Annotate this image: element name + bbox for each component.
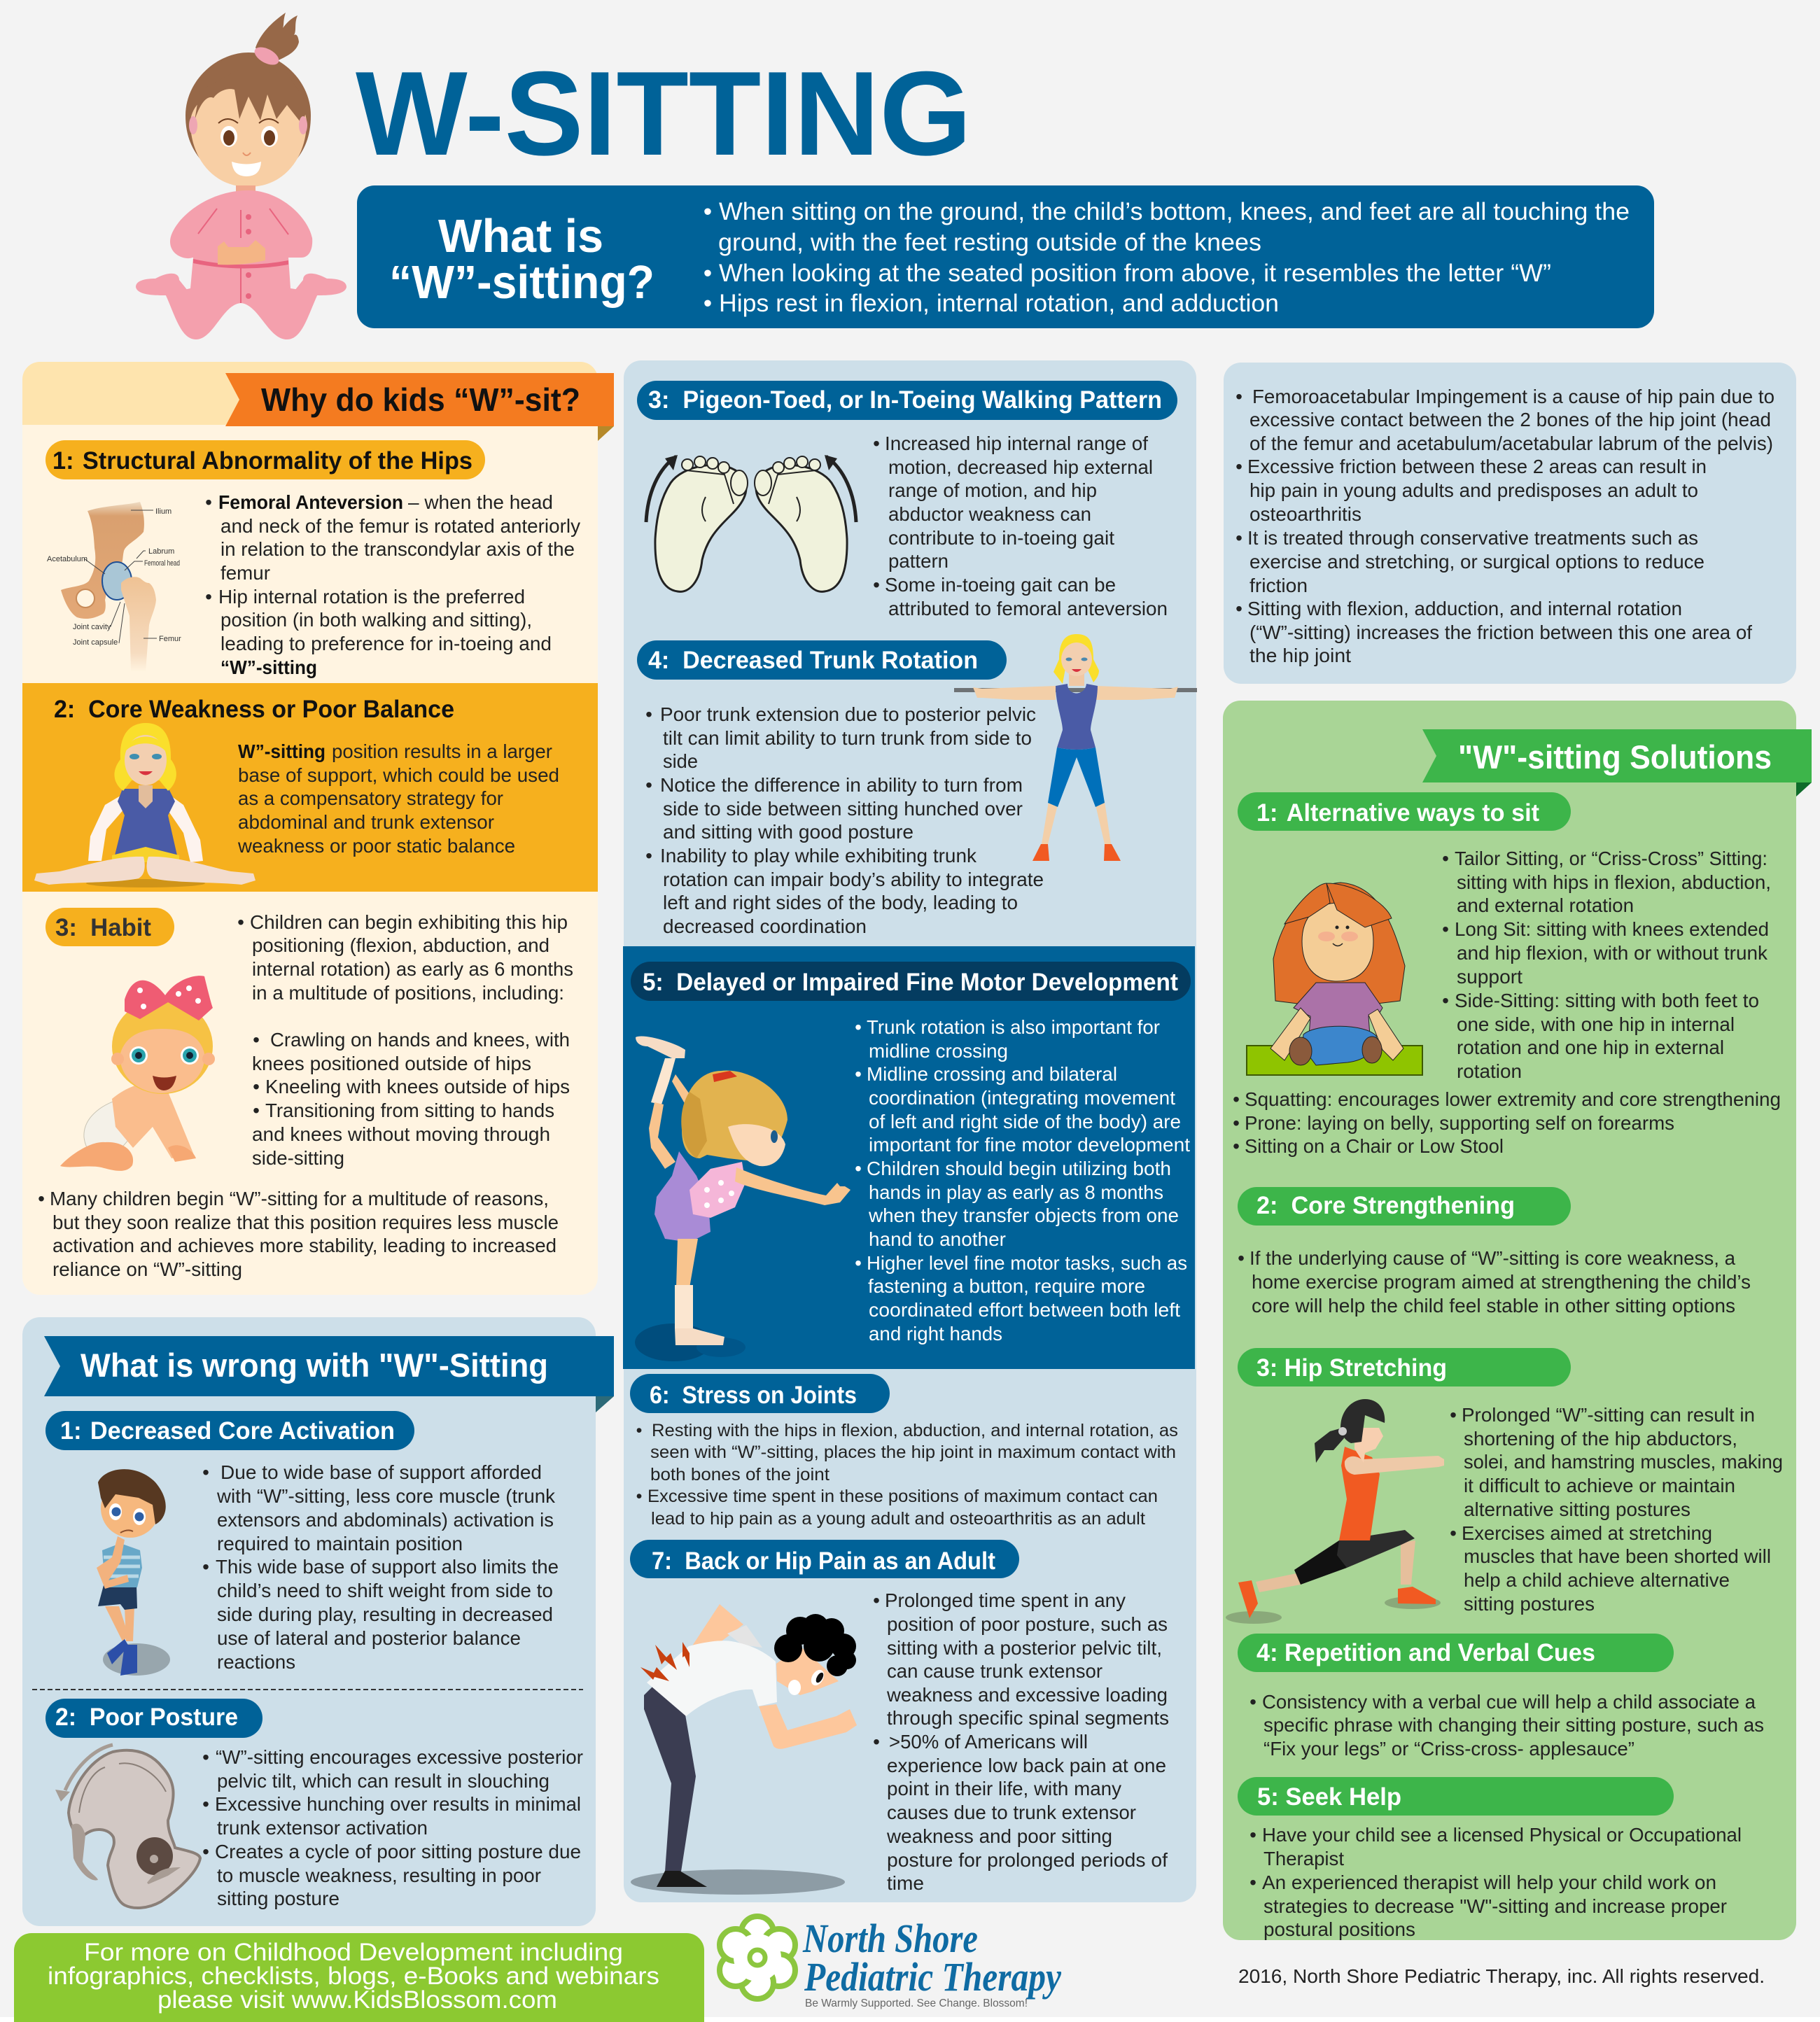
text: trunk rotation bullets: left and right sides of the body, leading to (663, 892, 1018, 913)
text: poor posture bullets: to muscle weakness, resulting in poor (217, 1865, 541, 1886)
panel: what is W-sitting (357, 185, 1654, 328)
text: verbal cues bullet: “Fix your legs” or “Criss-cross- applesauce” (1264, 1738, 1634, 1760)
text: alternative sitting bullets: • (1442, 918, 1449, 940)
text: in-toeing bullets: attributed to femoral anteversion (888, 598, 1168, 619)
text: habit bullets: • (253, 1076, 260, 1097)
text: habit bullets: • (253, 1100, 260, 1121)
text: poor posture bullets: sitting posture (217, 1888, 340, 1909)
text: alternative sitting bullets: one side, with one hip in internal (1457, 1013, 1735, 1035)
text: back pain bullets: • (873, 1589, 880, 1611)
text: alternative sitting bullets (1233, 848, 1781, 1157)
text: core activation bullets: Due to wide base of support afforded (220, 1461, 542, 1483)
text: in-toeing bullets: pattern (888, 550, 948, 572)
footer callout: more on childhood development: please visit www.KidsBlossom.com (158, 1986, 557, 2014)
panel: W-sitting solutions (1223, 701, 1812, 1940)
text: back pain bullets: point in their life, with many (887, 1778, 1121, 1799)
illustration: in-toeing feet with arrows (646, 455, 856, 591)
text: fine motor bullets: Midline crossing and bilateral (867, 1063, 1117, 1085)
panel: femoroacetabular impingement: the hip joint (1250, 645, 1351, 666)
illustration: thinking boy (97, 1469, 170, 1676)
heading: back or hip pain: 7: Back or Hip Pain as an Adult (652, 1547, 995, 1575)
text: fine motor bullets: fastening a button, require more (868, 1275, 1145, 1297)
ribbon: what is wrong: What is wrong with "W"-Sitting (80, 1347, 548, 1384)
panel: middle column reasons (623, 360, 1197, 1902)
text: habit bullets: and knees without moving through (252, 1123, 550, 1145)
text: definition bullets: Hips rest in flexion, internal rotation, and adduction (719, 290, 1279, 317)
heading: seek help: 5: Seek Help (1257, 1783, 1401, 1811)
text: trunk rotation bullets: and sitting with good posture (663, 821, 913, 843)
text: seek help bullets: strategies to decrease "W"-sitting and increase proper (1264, 1895, 1727, 1917)
text: habit bullets: Children can begin exhibiting this hip (250, 911, 568, 933)
text: poor posture bullets: Creates a cycle of poor sitting posture due (215, 1841, 581, 1862)
panel: femoroacetabular impingement: (“W”-sitting) increases the friction between this one area of (1250, 622, 1752, 643)
text: alternative sitting bullets: • (1233, 1112, 1240, 1134)
text: in-toeing bullets: motion, decreased hip external (888, 456, 1153, 478)
text: core activation bullets: reactions (217, 1651, 295, 1673)
text: alternative sitting bullets: • (1233, 1088, 1240, 1110)
heading: decreased trunk rotation: 4: Decreased Trunk Rotation (648, 647, 978, 674)
panel: femoroacetabular impingement: • (1236, 456, 1242, 477)
text: back pain bullets: experience low back pain at one (887, 1755, 1166, 1776)
logo: North Shore Pediatric Therapy: North Shore (802, 1916, 978, 1961)
text: core weakness explanation: as a compensatory strategy for (238, 787, 503, 809)
text: alternative sitting bullets: support (1457, 966, 1522, 988)
text: trunk rotation bullets: • (645, 703, 652, 725)
illustration: tilting pelvis with arrow (55, 1745, 200, 1908)
text: core strengthening bullet: If the underlying cause of “W”-sitting is core weakness, a (1250, 1247, 1735, 1269)
illustration: hip joint anatomy: Acetabulum (47, 555, 88, 563)
heading: habit: 3: Habit (55, 914, 151, 941)
text: core activation bullets: extensors and abdominals) activation is (217, 1509, 554, 1531)
text: definition bullets: ground, with the feet resting outside of the knees (718, 229, 1261, 256)
illustration: woman in lunge stretch (1226, 1399, 1444, 1624)
text: fine motor bullets: • (855, 1158, 862, 1179)
text: back pain bullets: through specific spinal segments (887, 1707, 1169, 1729)
text: habit bullets: Kneeling with knees outside of hips (265, 1076, 570, 1097)
text: habit bullets (237, 911, 573, 1169)
icon: flower (720, 1916, 795, 1999)
ribbon: solutions: "W"-sitting Solutions (1458, 738, 1772, 775)
text: fine motor bullets: • (855, 1252, 862, 1274)
text: habit bullets: knees positioned outside of hips (252, 1053, 531, 1074)
text: definition bullets (704, 198, 1630, 317)
footer callout: more on childhood development: For more on Childhood Development including (84, 1939, 623, 1966)
ribbon: why do kids W-sit: Why do kids “W”-sit? (261, 381, 580, 418)
text: alternative sitting bullets: Squatting: encourages lower extremity and core strengthening (1245, 1088, 1781, 1110)
text: poor posture bullets: Excessive hunching over results in minimal (215, 1793, 581, 1815)
text: habit bullets: side-sitting (252, 1147, 344, 1169)
text: trunk rotation bullets: Poor trunk extension due to posterior pelvic (660, 703, 1036, 725)
text: alternative sitting bullets: rotation and one hip in external (1457, 1037, 1724, 1058)
text: alternative sitting bullets: • (1442, 990, 1449, 1011)
text: fine motor bullets: of left and right side of the body) are (869, 1111, 1181, 1132)
text: back pain bullets: position of poor posture, such as (887, 1613, 1168, 1635)
panel: femoroacetabular impingement: It is treated through conservative treatments such as (1247, 527, 1698, 549)
text: in-toeing bullets: Some in-toeing gait can be (885, 574, 1116, 596)
heading: poor posture (46, 1699, 262, 1738)
text: definition bullets: When looking at the seated position from above, it resembles the letter “W” (719, 260, 1551, 287)
text: trunk rotation bullets: rotation can impair body’s ability to integrate (663, 869, 1044, 890)
text: fine motor bullets: hands in play as early as 8 months (869, 1181, 1163, 1203)
text: back pain bullets: can cause trunk extensor (887, 1660, 1102, 1682)
text: femoral anteversion: and neck of the femur is rotated anteriorly (220, 515, 580, 537)
text: stress on joints bullets: both bones of the joint (650, 1465, 830, 1484)
band: core weakness: 2: Core Weakness or Poor Balance (54, 696, 454, 723)
illustration: hip joint anatomy: Ilium (155, 507, 172, 516)
text: trunk rotation bullets (645, 703, 1044, 937)
heading: decreased trunk rotation (637, 640, 1007, 680)
text: core activation bullets: side during play, resulting in decreased (217, 1603, 553, 1625)
heading: what is W-sitting: “W”-sitting? (389, 256, 654, 309)
text: core activation bullets: This wide base of support also limits the (216, 1556, 559, 1578)
illustration: hip joint anatomy: Joint capsule (73, 638, 118, 647)
text: poor posture bullets: trunk extensor activation (217, 1817, 428, 1839)
text: hip stretching bullets: it difficult to achieve or maintain (1464, 1475, 1735, 1496)
panel: femoroacetabular impingement: osteoarthritis (1250, 503, 1362, 525)
text: verbal cues bullet: • (1250, 1691, 1256, 1713)
text: core strengthening bullet: core will help the child feel stable in other sitting options (1252, 1295, 1735, 1317)
ribbon: solutions (1422, 729, 1812, 796)
text: fine motor bullets: hand to another (869, 1228, 1006, 1250)
heading: back or hip pain (630, 1540, 1019, 1578)
text: alternative sitting bullets: Long Sit: sitting with knees extended (1455, 918, 1769, 940)
text: back pain bullets: >50% of Americans will (889, 1731, 1088, 1753)
band: fine motor development (623, 946, 1195, 1369)
text: trunk rotation bullets: Notice the difference in ability to turn from (660, 774, 1023, 796)
text: femoral anteversion: position (in both walking and sitting), (220, 609, 532, 631)
text: femoral anteversion: in relation to the transcondylar axis of the (220, 538, 575, 560)
text: trunk rotation bullets: side (663, 750, 698, 772)
text: core strengthening bullet (1238, 1247, 1751, 1317)
text: core activation bullets: required to maintain position (217, 1533, 463, 1554)
text: many children: reliance on “W”-sitting (52, 1258, 242, 1280)
heading: repetition and verbal cues (1238, 1634, 1674, 1672)
heading: stress on joints: 6: Stress on Joints (650, 1382, 857, 1409)
text: alternative sitting bullets: Tailor Sitting, or “Criss-Cross” Sitting: (1455, 848, 1768, 869)
illustration: hip joint anatomy: Femoral head (144, 559, 180, 568)
text: seek help bullets (1250, 1824, 1742, 1940)
text: stress on joints bullets: Excessive time spent in these positions of maximum contact can (648, 1487, 1158, 1506)
text: seek help bullets: An experienced therapist will help your child work on (1262, 1872, 1716, 1893)
text: femoral anteversion: Femoral Anteversion (218, 491, 403, 513)
text: stress on joints bullets: seen with “W”-sitting, places the hip joint in maximum contact with (650, 1442, 1176, 1462)
text: back pain bullets: • (873, 1731, 880, 1753)
text: habit bullets: Transitioning from sitting to hands (265, 1100, 554, 1121)
logo: North Shore Pediatric Therapy: Be Warmly Supported. See Change. Blossom! (805, 1998, 1028, 2009)
heading: seek help (1238, 1777, 1674, 1816)
text: fine motor bullets: coordinated effort between both left (869, 1299, 1180, 1321)
illustration: red-haired girl sitting on mat (1247, 883, 1422, 1075)
text: hip stretching bullets: muscles that have been shorted will (1464, 1545, 1771, 1567)
text: femoral anteversion (205, 491, 580, 678)
panel: femoroacetabular impingement: friction (1250, 575, 1308, 596)
text: core activation bullets: with “W”-sitting, less core muscle (trunk (216, 1485, 556, 1507)
text: stress on joints bullets: • (636, 1487, 642, 1506)
panel: femoroacetabular impingement: • (1236, 386, 1242, 407)
text: stress on joints bullets (636, 1421, 1178, 1529)
text: fine motor bullets: Children should begin utilizing both (867, 1158, 1171, 1179)
text: femoral anteversion: – when the head (408, 491, 553, 513)
text: core activation bullets: • (202, 1461, 209, 1483)
panel: femoroacetabular impingement: Excessive friction between these 2 areas can result in (1247, 456, 1707, 477)
panel: femoroacetabular impingement: • (1236, 527, 1242, 549)
panel: femoroacetabular impingement: hip pain in young adults and predisposes an adult to (1250, 479, 1698, 501)
text: back pain bullets: posture for prolonged periods of (887, 1849, 1168, 1871)
text: hip stretching bullets: sitting postures (1464, 1593, 1595, 1615)
band: core weakness (22, 683, 598, 892)
illustration: hip joint anatomy: Joint cavity (73, 623, 111, 631)
text: core weakness explanation: position results in a larger (332, 740, 552, 762)
text: many children (38, 1188, 559, 1280)
illustration: person bent over with back pain (631, 1604, 857, 1895)
text: core strengthening bullet: • (1238, 1247, 1245, 1269)
text: hip stretching bullets: Prolonged “W”-sitting can result in (1462, 1404, 1755, 1426)
text: core activation bullets (202, 1461, 559, 1673)
text: definition bullets: • (704, 198, 712, 225)
text: back pain bullets (873, 1589, 1169, 1894)
text: alternative sitting bullets: Prone: laying on belly, supporting self on forearms (1245, 1112, 1674, 1134)
text: many children: activation and achieves more stability, leading to increased (52, 1235, 556, 1256)
text: poor posture bullets: • (202, 1841, 209, 1862)
text: back pain bullets: weakness and excessive loading (886, 1684, 1168, 1706)
text: hip stretching bullets: Exercises aimed at stretching (1462, 1522, 1712, 1544)
text: fine motor bullets: coordination (integrating movement (869, 1087, 1175, 1109)
text: core weakness explanation: base of support, which could be used (238, 764, 559, 786)
panel: femoroacetabular impingement: Femoroacetabular Impingement is a cause of hip pain due to (1252, 386, 1774, 407)
illustration: hip joint anatomy: Labrum (148, 547, 174, 556)
text: trunk rotation bullets: • (645, 845, 652, 866)
text: alternative sitting bullets: and external rotation (1457, 894, 1634, 916)
text: core strengthening bullet: home exercise program aimed at strengthening the child’s (1252, 1271, 1751, 1293)
text: poor posture bullets: “W”-sitting encourages excessive posterior (216, 1746, 583, 1768)
text: many children: but they soon realize that this position requires less muscle (52, 1212, 559, 1233)
text: hip stretching bullets: shortening of the hip abductors, (1464, 1428, 1737, 1449)
text: hip stretching bullets: • (1450, 1522, 1457, 1544)
heading: hip stretching (1238, 1348, 1571, 1386)
panel: femoroacetabular impingement: of the femur and acetabulum/acetabular labrum of the pelvis) (1250, 433, 1773, 454)
text: hip stretching bullets: solei, and hamstring muscles, making (1464, 1451, 1783, 1473)
text: definition bullets: • (704, 290, 712, 317)
panel: what is wrong with W-sitting (22, 1317, 614, 1926)
text: alternative sitting bullets: Side-Sitting: sitting with both feet to (1455, 990, 1759, 1011)
text: stress on joints bullets: lead to hip pain as a young adult and osteoarthritis as an adult (651, 1509, 1145, 1529)
heading: poor posture: 2: Poor Posture (55, 1704, 238, 1731)
text: habit bullets: internal rotation) as early as 6 months (252, 958, 573, 980)
text: core weakness explanation: abdominal and trunk extensor (238, 811, 494, 833)
text: seek help bullets: Therapist (1264, 1848, 1344, 1869)
text: femoral anteversion: • (205, 586, 212, 608)
text: seek help bullets: Have your child see a licensed Physical or Occupational (1262, 1824, 1742, 1846)
text: fine motor bullets: Trunk rotation is also important for (867, 1016, 1160, 1038)
text: habit bullets: • (237, 911, 244, 933)
text: stress on joints bullets: • (636, 1421, 642, 1440)
heading: structural abnormality: 1: Structural Abnormality of the Hips (52, 447, 472, 475)
illustration: hip joint anatomy: Femur (159, 635, 181, 643)
illustration: girl sitting with legs apart (34, 723, 255, 887)
text: alternative sitting bullets: rotation (1457, 1060, 1522, 1082)
text: femoral anteversion: Hip internal rotation is the preferred (218, 586, 525, 608)
panel: femoroacetabular impingement: excessive contact between the 2 bones of the hip joint (head (1250, 409, 1771, 430)
heading: habit (46, 908, 174, 946)
text: femoral anteversion: • (205, 491, 212, 513)
text: back pain bullets: weakness and poor sitting (886, 1825, 1112, 1847)
text: fine motor bullets: important for fine motor development (869, 1134, 1190, 1156)
text: fine motor bullets: midline crossing (869, 1040, 1008, 1062)
text: fine motor bullets: Higher level fine motor tasks, such as (867, 1252, 1187, 1274)
logo: North Shore Pediatric Therapy: Pediatric Therapy (804, 1954, 1061, 2000)
text: habit bullets: positioning (flexion, abduction, and (252, 934, 550, 956)
text: in-toeing bullets: • (873, 433, 880, 454)
text: trunk rotation bullets: • (645, 774, 652, 796)
text: in-toeing bullets: Increased hip internal range of (885, 433, 1148, 454)
text: alternative sitting bullets: and hip flexion, with or without trunk (1457, 942, 1768, 964)
text: definition bullets: • (704, 260, 712, 287)
text: alternative sitting bullets: • (1442, 848, 1449, 869)
heading: pigeon-toed (637, 381, 1177, 420)
text: in-toeing bullets (873, 433, 1168, 619)
heading: fine motor (631, 962, 1191, 1001)
text: back pain bullets: sitting with a posterior pelvic tilt, (887, 1637, 1162, 1659)
text: femoral anteversion: femur (220, 562, 270, 584)
text: verbal cues bullet: Consistency with a verbal cue will help a child associate a (1262, 1691, 1756, 1713)
heading: fine motor: 5: Delayed or Impaired Fine Motor Development (643, 969, 1178, 996)
text: habit bullets: in a multitude of positions, including: (252, 982, 564, 1004)
text: core activation bullets: use of lateral and posterior balance (217, 1627, 521, 1649)
text: fine motor bullets: and right hands (869, 1323, 1002, 1345)
footer callout: more on childhood development: infographics, checklists, blogs, e-Books and webinars (48, 1963, 659, 1990)
illustration: woman twisting with bar (954, 634, 1197, 861)
text: back pain bullets: time (887, 1872, 924, 1894)
text: hip stretching bullets: • (1450, 1404, 1457, 1426)
text: seek help bullets: postural positions (1264, 1918, 1415, 1940)
illustration: crawling baby with bow (60, 976, 215, 1171)
text: hip stretching bullets (1450, 1404, 1783, 1615)
heading: what is W-sitting: What is (438, 210, 603, 262)
text: hip stretching bullets: alternative sitting postures (1464, 1498, 1690, 1520)
ribbon: what is wrong (44, 1336, 614, 1412)
heading: structural abnormality (46, 440, 485, 479)
text: stress on joints bullets: Resting with the hips in flexion, abduction, and internal rotation, as (652, 1421, 1178, 1440)
text: habit bullets: Crawling on hands and knees, with (270, 1029, 570, 1051)
title: W-SITTING (356, 47, 972, 181)
heading: alternative ways to sit: 1: Alternative ways to sit (1256, 799, 1539, 827)
text: alternative sitting bullets: sitting with hips in flexion, abduction, (1457, 871, 1771, 893)
text: trunk rotation bullets: decreased coordination (663, 915, 867, 937)
text: fine motor bullets: • (855, 1063, 862, 1085)
ribbon: why do kids W-sit (225, 373, 614, 441)
text: trunk rotation bullets: side to side between sitting hunched over (663, 798, 1023, 820)
heading: core strengthening: 2: Core Strengthening (1256, 1192, 1515, 1219)
text: in-toeing bullets: range of motion, and hip (888, 479, 1097, 501)
panel: femoroacetabular impingement: • (1236, 598, 1242, 619)
text: hip stretching bullets: help a child achieve alternative (1464, 1569, 1730, 1591)
panel: femoroacetabular impingement (1224, 363, 1796, 684)
illustration: seated baby in pink pajamas (136, 13, 346, 339)
text: verbal cues bullet: specific phrase with changing their sitting posture, such as (1264, 1714, 1764, 1736)
text: core activation bullets: child’s need to shift weight from side to (217, 1580, 553, 1601)
text: core weakness explanation (237, 740, 559, 857)
text: alternative sitting bullets: Sitting on a Chair or Low Stool (1245, 1135, 1504, 1157)
text: seek help bullets: • (1250, 1872, 1256, 1893)
text: in-toeing bullets: abductor weakness can (888, 503, 1091, 525)
illustration: ballet dancer (635, 1037, 850, 1361)
text: verbal cues bullet (1250, 1691, 1764, 1760)
heading: repetition and verbal cues: 4: Repetition and Verbal Cues (1256, 1639, 1595, 1666)
text: many children: Many children begin “W”-sitting for a multitude of reasons, (50, 1188, 549, 1209)
text: femoral anteversion: leading to preference for in-toeing and (220, 633, 552, 654)
panel: femoroacetabular impingement: Sitting with flexion, adduction, and internal rotation (1247, 598, 1682, 619)
text: definition bullets: When sitting on the ground, the child’s bottom, knees, and feet are all touching the (719, 198, 1630, 225)
text: core weakness explanation: weakness or poor static balance (237, 835, 515, 857)
text: femoral anteversion: “W”-sitting (220, 657, 317, 678)
copyright: 2016, North Shore Pediatric Therapy, inc. All rights reserved. (1238, 1965, 1765, 1987)
heading: what is W-sitting (389, 210, 654, 309)
heading: decreased core activation: 1: Decreased Core Activation (60, 1417, 395, 1445)
panel: why do kids W-sit (22, 362, 614, 1295)
heading: alternative ways to sit (1238, 792, 1571, 831)
text: fine motor bullets (855, 1016, 1190, 1345)
heading: hip stretching: 3: Hip Stretching (1256, 1354, 1447, 1382)
text: in-toeing bullets: contribute to in-toeing gait (888, 527, 1114, 549)
panel: femoroacetabular impingement: exercise and stretching, or surgical options to reduce (1250, 551, 1704, 573)
text: trunk rotation bullets: Inability to play while exhibiting trunk (660, 845, 977, 866)
heading: pigeon-toed: 3: Pigeon-Toed, or In-Toeing Walking Pattern (648, 386, 1162, 414)
text: fine motor bullets: when they transfer objects from one (868, 1205, 1179, 1226)
text: alternative sitting bullets: • (1233, 1135, 1240, 1157)
illustration: hip joint anatomy (47, 502, 181, 672)
text: poor posture bullets (202, 1746, 583, 1909)
heading: stress on joints (630, 1374, 890, 1413)
text: core activation bullets: • (202, 1556, 209, 1578)
text: in-toeing bullets: • (873, 574, 880, 596)
text: back pain bullets: causes due to trunk extensor (887, 1802, 1136, 1823)
text: seek help bullets: • (1250, 1824, 1256, 1846)
text: trunk rotation bullets: tilt can limit ability to turn trunk from side to (663, 727, 1032, 749)
text: many children: • (38, 1188, 45, 1209)
text: habit bullets: • (253, 1029, 260, 1051)
heading: decreased core activation (46, 1411, 414, 1450)
text: fine motor bullets: • (855, 1016, 862, 1038)
text: back pain bullets: Prolonged time spent in any (885, 1589, 1126, 1611)
logo: North Shore Pediatric Therapy (720, 1916, 1061, 2009)
text: poor posture bullets: • (202, 1793, 209, 1815)
text: poor posture bullets: pelvic tilt, which can result in slouching (217, 1770, 550, 1792)
text: poor posture bullets: • (202, 1746, 209, 1768)
heading: core strengthening (1238, 1187, 1571, 1226)
text: core weakness explanation: W”-sitting (238, 740, 326, 762)
footer callout: more on childhood development (14, 1933, 704, 2022)
